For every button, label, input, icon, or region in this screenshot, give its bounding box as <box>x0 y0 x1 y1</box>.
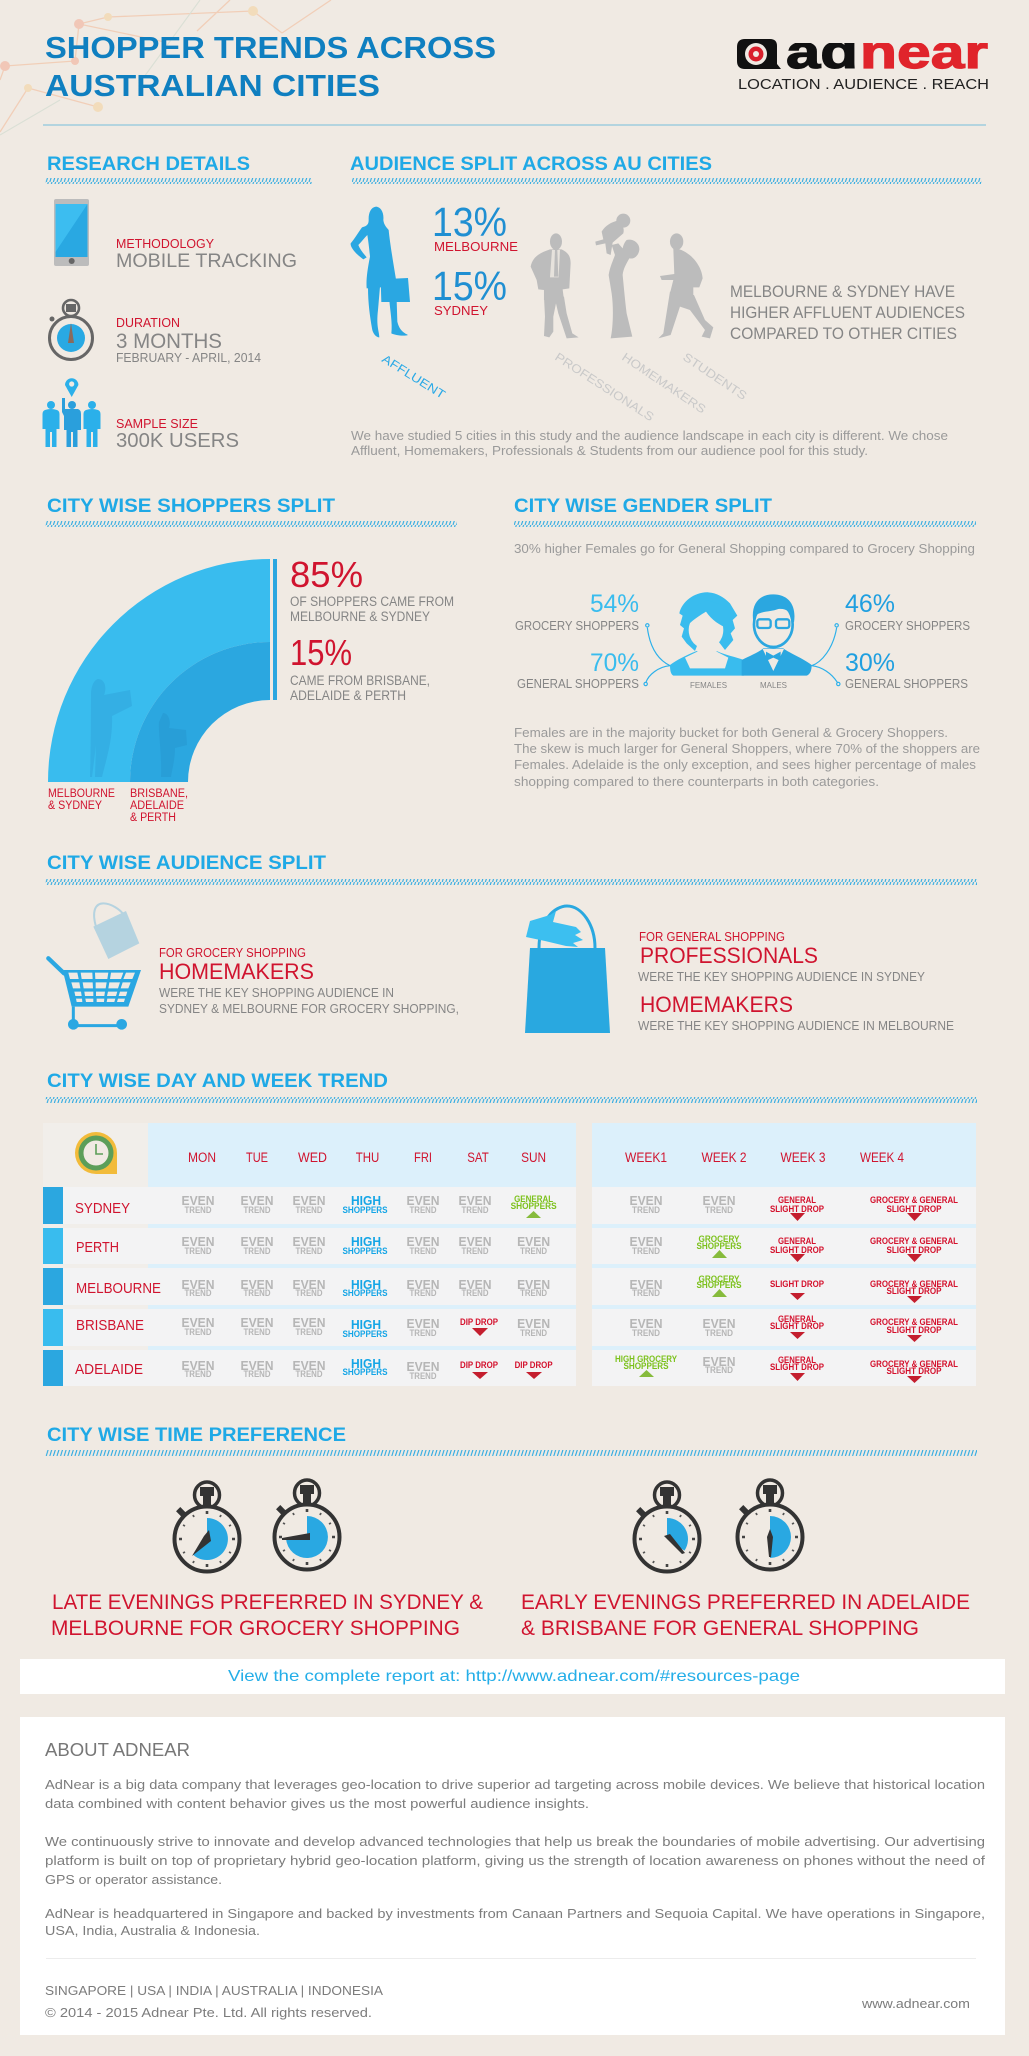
day headers: SAT <box>467 1150 489 1165</box>
row: brisbane: HIGH <box>351 1318 381 1332</box>
row: sydney: TREND <box>462 1205 489 1215</box>
text: gender intro: 30% higher Females go for General Shopping compared to Grocery Shopping <box>514 542 975 556</box>
row: melbourne weeks: GROCERY <box>698 1274 740 1285</box>
stat: 85%: OF SHOPPERS CAME FROM <box>290 594 454 609</box>
stats: male shoppers: GENERAL SHOPPERS <box>845 677 968 691</box>
row: melbourne: TREND <box>184 1288 212 1298</box>
row: perth weeks: GROCERY <box>698 1234 740 1245</box>
icon: phone <box>54 199 89 266</box>
icon: stopwatch late 1 <box>174 1482 240 1572</box>
text: about paragraphs <box>45 1777 985 1938</box>
row: melbourne: EVEN <box>406 1278 440 1292</box>
row: melbourne weeks: GROCERY & GENERAL <box>870 1279 958 1290</box>
footer text: SINGAPORE | USA | INDIA | AUSTRALIA | INDONESIA <box>45 1983 383 1998</box>
stats: male shoppers <box>845 590 970 691</box>
heading: about: ABOUT ADNEAR <box>45 1740 190 1760</box>
row: adelaide weeks: EVEN <box>702 1355 736 1369</box>
row: perth weeks: EVEN <box>630 1235 662 1249</box>
row: perth: EVEN <box>458 1235 492 1249</box>
row: melbourne: TREND <box>296 1288 323 1298</box>
text: grocery shopping audience: HOMEMAKERS <box>159 959 314 984</box>
row: brisbane weeks <box>630 1314 958 1342</box>
row: perth weeks: GENERAL <box>778 1236 816 1247</box>
row: adelaide: DIP DROP <box>460 1360 499 1371</box>
stat: 15% sydney: 15% <box>432 263 507 309</box>
audience labels: PROFESSIONALS <box>552 350 656 424</box>
row: adelaide weeks: HIGH GROCERY <box>615 1354 678 1365</box>
row: perth: TREND <box>410 1246 437 1256</box>
avatar labels: MALES <box>760 680 787 690</box>
title <box>45 30 496 103</box>
row: perth: TREND <box>296 1246 323 1256</box>
row: sydney weeks: TREND <box>632 1205 660 1215</box>
decorative network lines <box>0 0 331 135</box>
week headers: WEEK 2 <box>702 1150 746 1165</box>
table: week trend <box>592 1123 976 1386</box>
row: brisbane: EVEN <box>182 1316 214 1330</box>
text: early evenings: & BRISBANE FOR GENERAL SHOPPING <box>521 1617 919 1640</box>
row: adelaide: ADELAIDE <box>75 1362 143 1378</box>
text: study description: We have studied 5 cities in this study and the audience landscape in each city is different. We chose <box>351 429 948 443</box>
audience labels: HOMEMAKERS <box>619 350 708 416</box>
row: melbourne: EVEN <box>458 1278 492 1292</box>
week headers <box>625 1150 904 1165</box>
icon: affluent woman <box>351 207 410 337</box>
panel: duration: 3 MONTHS <box>116 330 222 353</box>
stats: female shoppers <box>515 590 639 691</box>
heading: audience split by city: CITY WISE AUDIENCE SPLIT <box>47 852 326 874</box>
text: general shopping audience: FOR GENERAL SHOPPING <box>639 930 785 944</box>
day headers: FRI <box>414 1150 432 1165</box>
table: day trend <box>43 1123 576 1386</box>
chart labels: ADELAIDE <box>130 800 184 812</box>
row: brisbane: TREND <box>296 1327 323 1337</box>
row: brisbane: BRISBANE <box>76 1318 144 1334</box>
row: adelaide <box>75 1357 553 1381</box>
title: SHOPPER TRENDS ACROSS <box>45 30 496 65</box>
row: sydney: TREND <box>244 1205 271 1215</box>
heading: day and week trend: CITY WISE DAY AND WEEK TREND <box>47 1070 388 1092</box>
row: adelaide: DIP DROP <box>515 1360 553 1371</box>
row: perth weeks: SLIGHT DROP <box>886 1245 942 1256</box>
heading: audience split by city <box>45 852 977 885</box>
row: melbourne: EVEN <box>517 1278 550 1292</box>
text: gender description: shopping compared to there counterparts in both categories. <box>514 775 879 789</box>
icon: shopping bag with hand <box>525 906 610 1033</box>
text: gender description <box>514 726 980 789</box>
text: gender description: Females are in the majority bucket for both General & Grocery Shoppers. <box>514 726 948 740</box>
header divider <box>43 124 986 126</box>
text: about paragraphs: data combined with content behavior gives us the most powerful audience insights. <box>45 1796 589 1811</box>
row: melbourne weeks <box>630 1274 958 1303</box>
row: sydney: EVEN <box>240 1194 274 1208</box>
week headers: WEEK 4 <box>860 1150 904 1165</box>
row: perth: EVEN <box>292 1235 326 1249</box>
row: adelaide weeks <box>615 1354 958 1383</box>
title: AUSTRALIAN CITIES <box>45 68 380 103</box>
text: gender description: Females. Adelaide is the only exception, and sees higher percentage of males <box>514 758 976 772</box>
row: perth: HIGH <box>351 1235 381 1249</box>
text: gender description: The skew is much larger for General Shoppers, where 70% of the shoppers are <box>514 742 980 756</box>
audience labels: AFFLUENT <box>379 352 449 402</box>
panel: methodology: METHODOLOGY <box>116 236 214 251</box>
row: brisbane: TREND <box>184 1327 212 1337</box>
row: adelaide: EVEN <box>240 1359 274 1373</box>
row: adelaide: SHOPPERS <box>342 1367 388 1377</box>
row: melbourne weeks: SLIGHT DROP <box>886 1286 942 1297</box>
stat: 15% <box>290 632 430 703</box>
heading: audience split <box>350 153 982 184</box>
text: about paragraphs: GPS or operator assistance. <box>45 1872 222 1887</box>
row: sydney weeks: SLIGHT DROP <box>886 1204 942 1215</box>
row: sydney: TREND <box>410 1205 437 1215</box>
icon: clock <box>75 1132 117 1174</box>
chart labels: MELBOURNE <box>48 788 115 800</box>
row: adelaide: TREND <box>410 1371 437 1381</box>
chart labels <box>48 788 188 824</box>
row: adelaide: EVEN <box>292 1359 326 1373</box>
text: grocery shopping audience: SYDNEY & MELBOURNE FOR GROCERY SHOPPING, <box>159 1002 459 1016</box>
row: adelaide: TREND <box>184 1369 212 1379</box>
row: brisbane: TREND <box>244 1327 271 1337</box>
logo: adnear: near <box>860 25 988 78</box>
stat: 85%: MELBOURNE & SYDNEY <box>290 609 430 624</box>
text: late evenings: LATE EVENINGS PREFERRED IN SYDNEY & <box>52 1591 483 1614</box>
day headers: THU <box>356 1150 379 1165</box>
row: melbourne: TREND <box>462 1288 489 1298</box>
text: grocery shopping audience: WERE THE KEY SHOPPING AUDIENCE IN <box>159 986 394 1000</box>
stat: 85% <box>290 554 454 624</box>
stat: 13% melbourne: MELBOURNE <box>434 239 518 254</box>
row: sydney: SHOPPERS <box>511 1201 557 1212</box>
row: sydney weeks: GENERAL <box>778 1195 816 1206</box>
footer text <box>45 1983 970 2020</box>
row: adelaide: TREND <box>296 1369 323 1379</box>
row: brisbane weeks: GENERAL <box>778 1314 816 1325</box>
text: about paragraphs: AdNear is a big data company that leverages geo-location to drive superior ad targeting across mobile devices. We believe that historical location <box>45 1777 985 1792</box>
stats: male shoppers: 46% <box>845 590 895 618</box>
icon: female and male avatars with connector lines <box>644 592 840 686</box>
heading: time preference: CITY WISE TIME PREFERENCE <box>47 1424 346 1446</box>
panel: sample size <box>42 378 239 452</box>
footer text: © 2014 - 2015 Adnear Pte. Ltd. All rights reserved. <box>45 2005 372 2020</box>
icon: student <box>658 233 713 338</box>
panel: methodology: MOBILE TRACKING <box>116 250 297 272</box>
row: perth: TREND <box>184 1246 212 1256</box>
row: brisbane: EVEN <box>240 1316 274 1330</box>
row: sydney: GENERAL <box>514 1194 553 1205</box>
row: melbourne weeks: SLIGHT DROP <box>770 1279 825 1290</box>
icon: professional man <box>531 233 579 338</box>
row: adelaide weeks: SLIGHT DROP <box>886 1366 942 1377</box>
row: melbourne: TREND <box>244 1288 271 1298</box>
icon: stopwatch early 1 <box>634 1482 700 1572</box>
row: adelaide weeks: SHOPPERS <box>624 1361 668 1372</box>
row: perth: SHOPPERS <box>342 1246 388 1256</box>
text: general shopping audience: PROFESSIONALS <box>640 943 818 968</box>
row: brisbane weeks: EVEN <box>702 1317 736 1331</box>
heading: audience split: AUDIENCE SPLIT ACROSS AU CITIES <box>350 153 712 175</box>
row: sydney: SHOPPERS <box>342 1205 388 1215</box>
panel: duration: FEBRUARY - APRIL, 2014 <box>116 350 261 365</box>
row: sydney: EVEN <box>406 1194 440 1208</box>
row: perth <box>76 1235 550 1256</box>
row: sydney weeks: EVEN <box>630 1194 662 1208</box>
row: brisbane weeks: TREND <box>632 1328 660 1338</box>
row: melbourne: EVEN <box>182 1278 214 1292</box>
panel: methodology <box>54 199 297 272</box>
row: brisbane: SHOPPERS <box>342 1329 388 1339</box>
row: sydney: HIGH <box>351 1194 381 1208</box>
row: adelaide weeks: GENERAL <box>778 1355 816 1366</box>
row: melbourne: EVEN <box>292 1278 326 1292</box>
row: perth: EVEN <box>517 1235 550 1249</box>
icon: stopwatch early 2 <box>738 1480 802 1570</box>
chart labels: BRISBANE, <box>130 788 188 800</box>
row: adelaide: HIGH <box>351 1357 381 1371</box>
text: general shopping audience: WERE THE KEY SHOPPING AUDIENCE IN MELBOURNE <box>638 1019 954 1033</box>
row: adelaide: EVEN <box>182 1359 214 1373</box>
week headers: WEEK1 <box>625 1150 667 1165</box>
icon: people with location pin <box>42 378 100 447</box>
text: study description: Affluent, Homemakers, Professionals & Students from our audience pool for this study. <box>351 444 868 458</box>
logo: adnear: LOCATION . AUDIENCE . REACH <box>738 76 989 93</box>
text: grocery shopping audience <box>159 946 459 1016</box>
row: brisbane: EVEN <box>406 1317 440 1331</box>
heading: shoppers split: CITY WISE SHOPPERS SPLIT <box>47 495 335 517</box>
row: brisbane weeks: SLIGHT DROP <box>886 1325 942 1336</box>
row: melbourne weeks: SHOPPERS <box>696 1280 742 1291</box>
text: affluent note: MELBOURNE & SYDNEY HAVE <box>730 283 955 301</box>
row: brisbane weeks: EVEN <box>630 1317 662 1331</box>
text: early evenings <box>521 1591 970 1640</box>
row: sydney weeks: TREND <box>705 1205 733 1215</box>
day headers: SUN <box>521 1150 546 1165</box>
heading: gender split <box>514 495 976 527</box>
text: about paragraphs: AdNear is headquartered in Singapore and backed by investments from Canaan Partners and Sequoia Capital. We have operations in Singapore, <box>45 1906 985 1921</box>
heading: day and week trend <box>45 1070 977 1103</box>
stat: 15%: CAME FROM BRISBANE, <box>290 673 430 688</box>
panel: duration: DURATION <box>116 315 180 330</box>
day headers <box>188 1150 546 1165</box>
row: sydney weeks <box>630 1194 958 1221</box>
icon: stopwatch late 2 <box>274 1480 340 1570</box>
text: late evenings: MELBOURNE FOR GROCERY SHOPPING <box>51 1617 460 1640</box>
stat: 15%: 15% <box>290 632 352 673</box>
panel: duration <box>50 300 261 365</box>
icon: cart and falling bag <box>48 903 141 1030</box>
row: adelaide weeks: GROCERY & GENERAL <box>870 1359 958 1370</box>
row: adelaide: TREND <box>244 1369 271 1379</box>
avatar labels <box>690 680 787 690</box>
row: melbourne: TREND <box>520 1288 548 1298</box>
text: about paragraphs: platform is built on top of proprietary hybrid geo-location platform, giving us the strength of location awareness on phones without the need of <box>45 1853 985 1868</box>
row: perth weeks: TREND <box>632 1246 660 1256</box>
row: perth weeks: GROCERY & GENERAL <box>870 1236 958 1247</box>
row: melbourne: HIGH <box>351 1278 381 1292</box>
text: general shopping audience: WERE THE KEY SHOPPING AUDIENCE IN SYDNEY <box>638 970 926 984</box>
heading: research details <box>45 153 312 184</box>
report link band <box>20 1659 1005 1694</box>
row: melbourne weeks: EVEN <box>630 1278 662 1292</box>
footer text: www.adnear.com <box>861 1996 970 2011</box>
audience labels: STUDENTS <box>680 350 749 403</box>
row: perth weeks: SHOPPERS <box>696 1241 742 1252</box>
panel: about adnear <box>20 1717 1005 2035</box>
panel: sample size: SAMPLE SIZE <box>116 416 198 431</box>
text: general shopping audience: HOMEMAKERS <box>640 992 793 1017</box>
heading: time preference <box>45 1424 977 1456</box>
text: affluent note <box>730 283 965 343</box>
chart: shoppers split arcs <box>48 559 277 782</box>
stat: 85%: 85% <box>290 554 363 595</box>
heading: research details: RESEARCH DETAILS <box>47 153 250 175</box>
icon: silhouette shopper small <box>159 713 187 777</box>
week headers: WEEK 3 <box>780 1150 826 1165</box>
stat: 13% melbourne: 13% <box>432 199 507 245</box>
row: sydney weeks: GROCERY & GENERAL <box>870 1195 958 1206</box>
text: study description <box>351 429 948 458</box>
row: sydney: EVEN <box>182 1194 214 1208</box>
row: perth weeks <box>630 1234 958 1262</box>
text: affluent note: COMPARED TO OTHER CITIES <box>730 325 957 343</box>
panel: sample size: 300K USERS <box>116 429 239 452</box>
row: perth: TREND <box>520 1246 548 1256</box>
row: sydney: EVEN <box>292 1194 326 1208</box>
row: perth: PERTH <box>76 1240 119 1256</box>
icon: homemaker with child <box>595 214 639 338</box>
heading: gender split: CITY WISE GENDER SPLIT <box>514 495 772 517</box>
report link band: View the complete report at: http://www.adnear.com/#resources-page <box>228 1668 800 1685</box>
day headers: MON <box>188 1150 216 1165</box>
stats: male shoppers: GROCERY SHOPPERS <box>845 619 970 633</box>
row: perth: EVEN <box>240 1235 274 1249</box>
row: perth: TREND <box>462 1246 489 1256</box>
row: brisbane: EVEN <box>517 1317 550 1331</box>
icon: stopwatch <box>50 300 92 360</box>
stats: male shoppers: 30% <box>845 649 895 677</box>
row: brisbane: DIP DROP <box>460 1317 499 1328</box>
row: perth: EVEN <box>406 1235 440 1249</box>
row: brisbane <box>76 1316 550 1339</box>
text: early evenings: EARLY EVENINGS PREFERRED IN ADELAIDE <box>521 1591 970 1614</box>
row: brisbane: TREND <box>410 1328 437 1338</box>
row: adelaide weeks: SLIGHT DROP <box>770 1362 825 1373</box>
row: perth weeks: SLIGHT DROP <box>770 1245 825 1256</box>
day headers: WED <box>298 1150 327 1165</box>
stats: female shoppers: 70% <box>590 649 639 677</box>
stats: female shoppers: 54% <box>590 590 639 618</box>
stat: 15%: ADELAIDE & PERTH <box>290 688 406 703</box>
text: about paragraphs: USA, India, Australia & Indonesia. <box>45 1923 260 1938</box>
row: sydney: EVEN <box>458 1194 492 1208</box>
icon: silhouette shopper large <box>90 679 132 777</box>
row: brisbane weeks: GROCERY & GENERAL <box>870 1317 958 1328</box>
row: melbourne weeks: TREND <box>632 1288 660 1298</box>
row: sydney: TREND <box>184 1205 212 1215</box>
logo: adnear: ad <box>786 25 858 78</box>
row: brisbane weeks: TREND <box>705 1328 733 1338</box>
stats: female shoppers: GROCERY SHOPPERS <box>515 619 639 633</box>
row: melbourne <box>76 1278 550 1298</box>
row: sydney: TREND <box>296 1205 323 1215</box>
row: brisbane weeks: SLIGHT DROP <box>770 1321 825 1332</box>
text: about paragraphs: We continuously strive to innovate and develop advanced technologies that help us break the boundaries of mobile advertising. Our advertising <box>45 1834 985 1849</box>
text: general shopping audience <box>638 930 954 1033</box>
text: grocery shopping audience: FOR GROCERY SHOPPING <box>159 946 306 960</box>
row: melbourne: MELBOURNE <box>76 1281 161 1297</box>
stat: 15% sydney: SYDNEY <box>434 303 488 318</box>
avatar labels: FEMALES <box>690 680 727 690</box>
row: brisbane: TREND <box>520 1328 548 1338</box>
text: affluent note: HIGHER AFFLUENT AUDIENCES <box>730 304 965 322</box>
chart labels: & PERTH <box>130 812 176 824</box>
row: sydney weeks: SLIGHT DROP <box>770 1204 825 1215</box>
logo: adnear <box>737 39 988 89</box>
chart labels: & SYDNEY <box>48 800 102 812</box>
row: melbourne: TREND <box>410 1288 437 1298</box>
audience labels <box>379 350 749 424</box>
row: perth: EVEN <box>182 1235 214 1249</box>
row: adelaide: EVEN <box>406 1360 440 1374</box>
row: adelaide weeks: TREND <box>705 1365 733 1375</box>
row: brisbane: EVEN <box>292 1316 326 1330</box>
text: late evenings <box>51 1591 483 1640</box>
stats: female shoppers: GENERAL SHOPPERS <box>517 677 639 691</box>
row: perth: TREND <box>244 1246 271 1256</box>
row: melbourne: EVEN <box>240 1278 274 1292</box>
day headers: TUE <box>246 1150 268 1165</box>
row: sydney weeks: EVEN <box>702 1194 736 1208</box>
row: melbourne: SHOPPERS <box>342 1288 388 1298</box>
row: sydney <box>75 1194 557 1218</box>
row: sydney: SYDNEY <box>75 1201 130 1217</box>
heading: shoppers split <box>45 495 457 527</box>
